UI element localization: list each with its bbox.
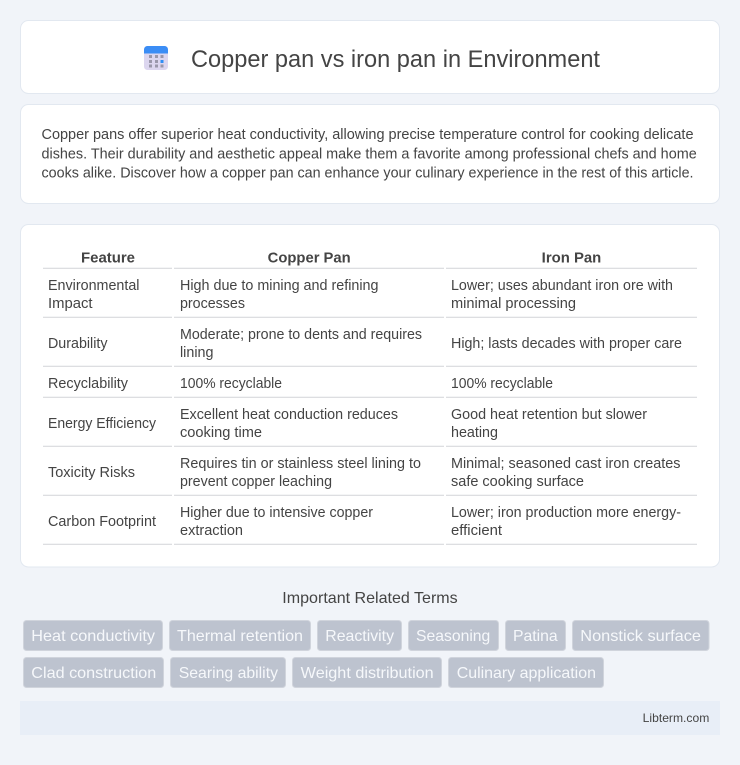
- tag: culinary application: [448, 658, 604, 688]
- row: carbon footprint: [48, 505, 681, 539]
- tag: seasoning: [408, 620, 498, 650]
- tag: searing ability: [170, 658, 286, 688]
- row: recyclability: [48, 376, 553, 392]
- tag: weight distribution: [292, 658, 442, 688]
- tag: reactivity: Reactivity: [325, 628, 394, 645]
- row: environmental impact: processes: [180, 296, 245, 312]
- table header row: Copper Pan: [268, 250, 351, 266]
- row: environmental impact: Impact: [48, 296, 93, 312]
- icon: calendar: [144, 46, 168, 70]
- tag: weight distribution: Weight distribution: [301, 665, 434, 682]
- intro text: cooks alike. Discover how a copper pan can enhance your culinary experience in the rest of this article.: [42, 166, 694, 182]
- row: carbon footprint: extraction: [180, 523, 243, 539]
- tag: nonstick surface: [572, 620, 709, 650]
- row: environmental impact: [48, 278, 673, 312]
- tag: clad construction: Clad construction: [31, 665, 156, 682]
- row: carbon footprint: efficient: [451, 523, 502, 539]
- row: environmental impact: minimal processing: [451, 296, 576, 312]
- intro text: [42, 127, 697, 182]
- row: energy efficiency: Energy Efficiency: [48, 416, 157, 432]
- tag: thermal retention: [170, 620, 310, 650]
- row: recyclability: 100% recyclable: [451, 376, 553, 392]
- row: energy efficiency: heating: [451, 425, 498, 441]
- row: carbon footprint: Carbon Footprint: [48, 514, 156, 530]
- row: durability: High; lasts decades with proper care: [451, 336, 682, 352]
- row: environmental impact: Environmental: [48, 278, 140, 294]
- tag: heat conductivity: [24, 620, 162, 650]
- row: energy efficiency: [48, 407, 647, 441]
- tag: patina: [506, 620, 566, 650]
- row: recyclability: Recyclability: [48, 376, 129, 392]
- intro text: dishes. Their durability and aesthetic appeal make them a favorite among professional chefs and home: [42, 146, 697, 162]
- row: recyclability: 100% recyclable: [180, 376, 282, 392]
- row: durability: Durability: [48, 336, 108, 352]
- row: toxicity risks: Minimal; seasoned cast iron creates: [451, 456, 680, 472]
- tag: reactivity: [318, 620, 402, 650]
- footer bar: [20, 701, 720, 735]
- row: toxicity risks: [48, 456, 680, 490]
- row: toxicity risks: prevent copper leaching: [180, 474, 332, 490]
- intro text: Copper pans offer superior heat conductivity, allowing precise temperature control for cooking delicate: [42, 127, 694, 143]
- row: carbon footprint: Higher due to intensive copper: [180, 505, 373, 521]
- related term tags: [24, 620, 709, 688]
- row: energy efficiency: cooking time: [180, 425, 262, 441]
- panel: title header: [20, 20, 720, 94]
- title: Copper pan vs iron pan in Environment: [191, 46, 600, 73]
- tag: clad construction: [24, 658, 164, 688]
- table header row: Feature: [81, 250, 135, 266]
- row: durability: lining: [180, 345, 214, 361]
- row: durability: Moderate; prone to dents and requires: [180, 327, 422, 343]
- row: carbon footprint: Lower; iron production more energy-: [451, 505, 681, 521]
- footer credit: Libterm.com: [643, 711, 709, 725]
- row: durability: [48, 327, 682, 361]
- heading: important related terms: Important Related Terms: [282, 590, 458, 607]
- tag: searing ability: Searing ability: [179, 665, 278, 682]
- tag: culinary application: Culinary application: [457, 665, 596, 682]
- tag: thermal retention: Thermal retention: [177, 628, 303, 645]
- panel: comparison table: [20, 224, 720, 567]
- tag: heat conductivity: Heat conductivity: [31, 628, 155, 645]
- table header row: Iron Pan: [542, 250, 601, 266]
- table header row: [81, 250, 601, 266]
- row: energy efficiency: Good heat retention but slower: [451, 407, 647, 423]
- tag: seasoning: Seasoning: [416, 628, 490, 645]
- panel: introduction: [20, 104, 720, 204]
- row: toxicity risks: Toxicity Risks: [48, 465, 135, 481]
- row: toxicity risks: Requires tin or stainless steel lining to: [180, 456, 421, 472]
- tag: nonstick surface: Nonstick surface: [580, 628, 701, 645]
- row: energy efficiency: Excellent heat conduction reduces: [180, 407, 398, 423]
- row: environmental impact: High due to mining and refining: [180, 278, 378, 294]
- tag: patina: Patina: [513, 628, 558, 645]
- row: toxicity risks: safe cooking surface: [451, 474, 584, 490]
- row: environmental impact: Lower; uses abundant iron ore with: [451, 278, 673, 294]
